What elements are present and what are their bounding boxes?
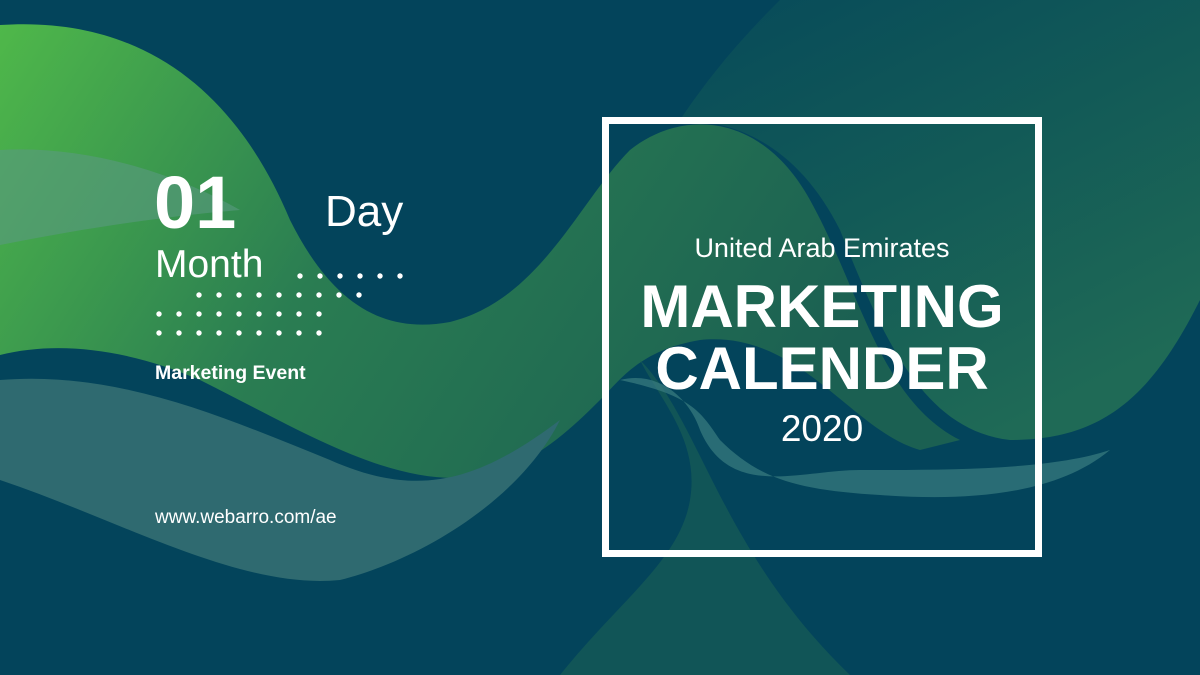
- light teal right band: [620, 378, 1110, 497]
- light teal upper-left band: [0, 149, 240, 245]
- main title: [640, 273, 1004, 402]
- country subtitle: United Arab Emirates: [694, 233, 950, 263]
- main green band: [0, 24, 960, 478]
- light teal lower-left band: [0, 379, 560, 581]
- main title: MARKETING: [640, 273, 1004, 340]
- main title: CALENDER: [655, 335, 989, 402]
- green under frame to bottom: [560, 360, 850, 675]
- website url: www.webarro.com/ae: [155, 507, 337, 528]
- month label: Month: [155, 243, 263, 286]
- title frame: [602, 117, 1042, 557]
- top right green area: [680, 0, 1200, 440]
- dot pattern: [156, 273, 403, 336]
- day label: Day: [325, 187, 403, 236]
- year: 2020: [781, 408, 863, 449]
- event label: Marketing Event: [155, 362, 306, 384]
- date number: 01: [154, 161, 236, 244]
